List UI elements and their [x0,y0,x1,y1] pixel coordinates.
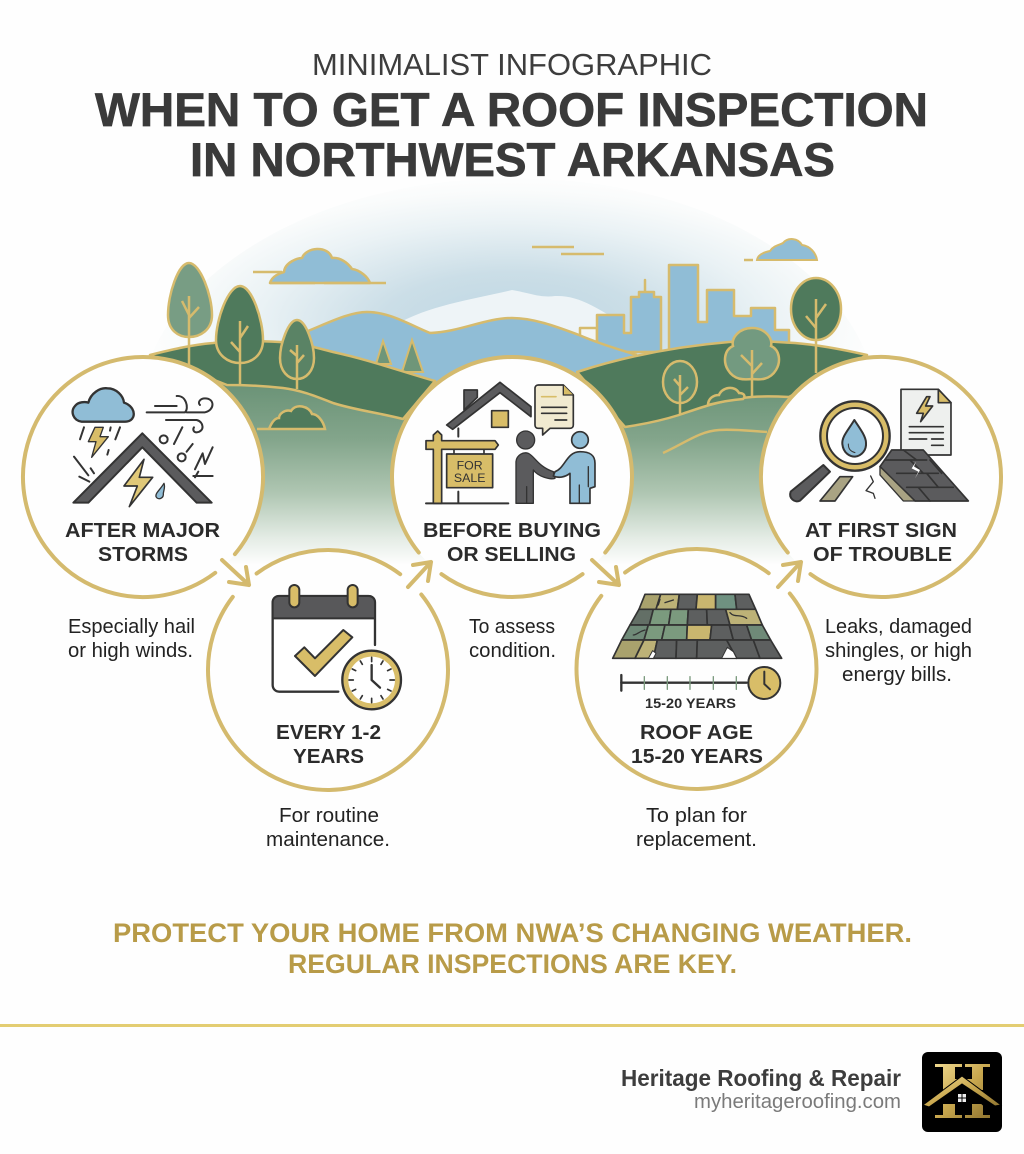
caption: at first sign of trouble: Leaks, damaged [825,616,972,638]
caption: at first sign of trouble: energy bills. [842,664,952,686]
skyline [580,265,789,352]
icon: for sale house [426,382,595,503]
ring: first sign of trouble [761,357,1001,597]
icon: for sale house: SALE [454,471,485,485]
pine trees [376,340,423,372]
label: every 1-2 years [276,721,381,768]
arrow 1 to 2 [222,560,249,585]
blue hills [308,312,637,400]
ring: after major storms [23,357,263,597]
caption: at first sign of trouble: shingles, or high [825,640,972,662]
caption: roof age: To plan for [646,805,747,827]
cloud left [253,249,386,283]
ring: every 1-2 years [208,550,448,790]
caption: roof age: replacement. [636,829,757,851]
caption: before buying or selling [469,616,556,662]
icon: for sale house: FOR [457,458,483,472]
caption: before buying or selling: To assess [469,616,555,638]
caption: after major storms [68,616,195,662]
caption: every 1-2 years: maintenance. [266,829,390,851]
right dark hill [577,341,867,427]
caption: every 1-2 years [266,805,390,851]
ring: roof age [576,549,816,789]
label: after major storms: STORMS [98,543,188,566]
arrow 2 to 3 [408,562,431,587]
caption: at first sign of trouble [825,616,972,686]
footer brand text: Heritage Roofing & Repair [621,1065,901,1091]
arrow 4 to 5 [778,562,801,587]
tree: round right [725,328,779,398]
meadow fade [180,384,850,570]
caption: after major storms: or high winds. [68,640,193,662]
tree: dark left [216,286,263,384]
caption: before buying or selling: condition. [469,640,556,662]
arrow 3 to 4 [592,560,619,585]
icon: magnifier and damaged roof [790,389,968,501]
label: roof age: 15-20 YEARS [631,745,763,768]
distant white ridge [395,290,625,345]
sky lines [532,247,753,260]
eyebrow title: MINIMALIST INFOGRAPHIC [312,47,712,82]
tree: light left [168,263,212,365]
label: after major storms [65,519,220,566]
left dark hill [150,341,435,419]
label: roof age [631,721,763,768]
white circle backs [23,357,1001,790]
main title [95,83,928,186]
tree: small dark left [280,320,314,389]
footer divider [0,1024,1024,1027]
small label: 15-20 years: 15-20 YEARS [645,695,736,711]
label: at first sign of trouble [805,519,957,566]
footer brand text [621,1065,901,1113]
label: at first sign of trouble: AT FIRST SIGN [805,519,957,542]
icon: storm roof [73,388,213,507]
path line right [663,430,767,453]
cloud right [757,239,817,260]
logo [922,1052,1002,1132]
label: every 1-2 years: YEARS [293,745,364,768]
label: before buying or selling: OR SELLING [447,543,576,566]
tree: small light right [663,361,697,415]
icon: calendar and clock [273,585,401,709]
main title: WHEN TO GET A ROOF INSPECTION [95,83,928,136]
callout: REGULAR INSPECTIONS ARE KEY. [288,949,737,979]
label: before buying or selling [423,519,601,566]
main title: IN NORTHWEST ARKANSAS [190,133,835,186]
heading block [95,47,928,186]
landscape illustration [150,178,868,570]
label: after major storms: AFTER MAJOR [65,519,220,542]
footer brand text: myheritageroofing.com [694,1091,901,1113]
label: before buying or selling: BEFORE BUYING [423,519,601,542]
caption: after major storms: Especially hail [68,616,195,638]
callout [113,918,912,979]
callout: PROTECT YOUR HOME FROM NWA’S CHANGING WEATHER. [113,918,912,948]
label: at first sign of trouble: OF TROUBLE [813,543,952,566]
icon: aged shingles and timeline [613,594,782,699]
label: every 1-2 years: EVERY 1-2 [276,721,381,744]
ring: before buying or selling [392,357,632,597]
label: roof age: ROOF AGE [640,721,753,744]
caption: roof age [636,805,757,851]
ring arcs and arrows [23,357,1001,790]
bush right [708,388,744,405]
sky [150,178,868,358]
caption: every 1-2 years: For routine [279,805,379,827]
bush left [257,406,325,429]
tree: dark right [791,278,841,373]
